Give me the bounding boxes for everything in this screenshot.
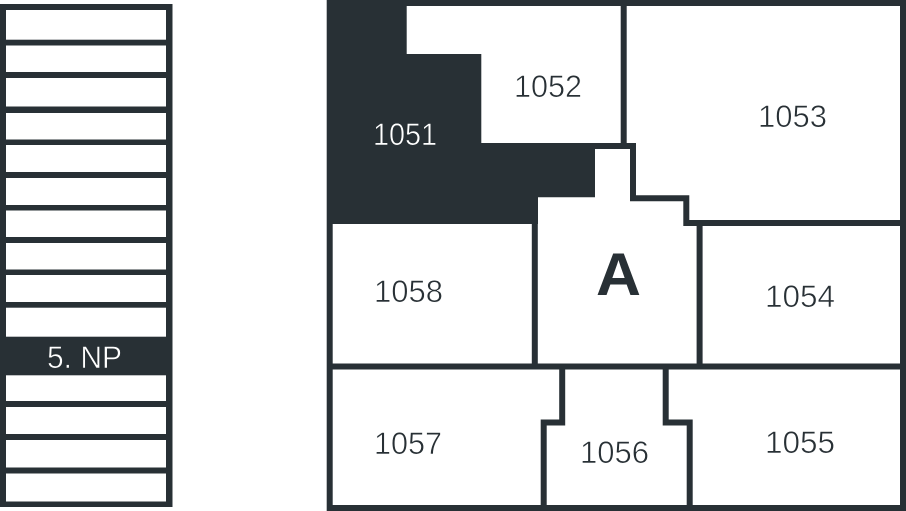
panel: apartment plan — [327, 0, 906, 511]
room number 1054: 1054 — [765, 278, 835, 314]
room number 1052: 1052 — [514, 68, 582, 104]
room walls — [327, 0, 906, 511]
core label A: A — [596, 241, 641, 308]
room number 1056: 1056 — [580, 434, 649, 470]
panel: building section floors — [0, 4, 172, 507]
plan outline — [330, 3, 903, 508]
unit 1051 highlighted — [327, 0, 595, 224]
room number 1055: 1055 — [765, 424, 835, 460]
room number 1051: 1051 — [373, 116, 437, 152]
floor label: 5. NP: 5. NP — [47, 339, 122, 375]
room number 1058: 1058 — [374, 273, 443, 309]
room number 1057: 1057 — [374, 425, 442, 461]
room number 1053: 1053 — [758, 98, 827, 134]
